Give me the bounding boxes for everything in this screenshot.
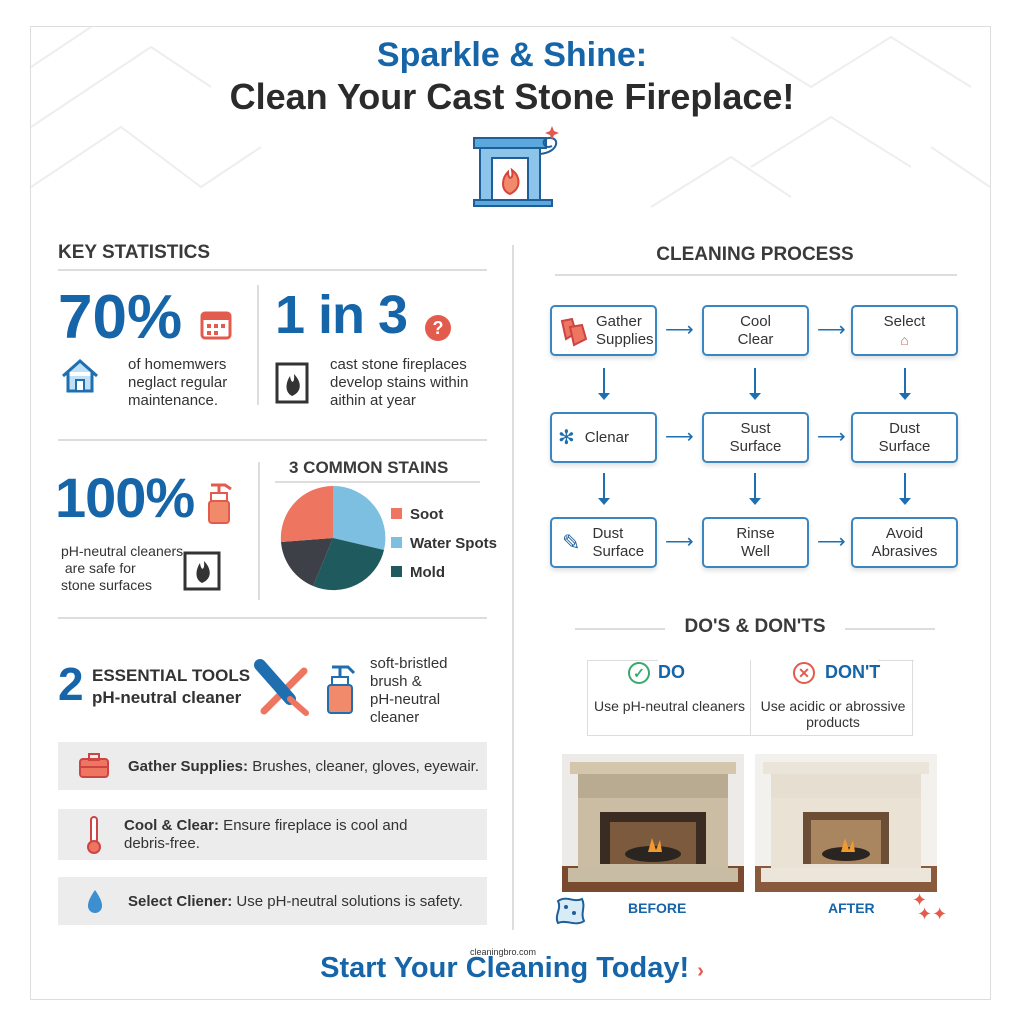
flow chart: Sust xyxy=(740,420,770,436)
label: after: AFTER xyxy=(828,900,875,916)
bar: select cleaner: Select Cliener: Use pH-neutral solutions is safety. xyxy=(128,892,463,910)
bar: gather supplies: Gather Supplies: Brushes, cleaner, gloves, eyewair. xyxy=(128,758,479,774)
do / don't box: ✕ xyxy=(798,665,810,681)
flow chart: ✎ xyxy=(562,530,580,554)
stat: 1 in 3: develop stains within xyxy=(330,374,468,391)
panel: 3 common stains: 3 COMMON STAINS xyxy=(289,458,448,477)
essential tools: ESSENTIAL TOOLS xyxy=(92,666,250,685)
heading: do's & don'ts xyxy=(575,616,935,638)
flow chart: Rinse xyxy=(736,524,775,542)
icon: question xyxy=(425,315,451,341)
stat: 70%: neglact regular xyxy=(128,374,227,391)
heading: cleaning process: CLEANING PROCESS xyxy=(656,244,854,265)
do / don't box: DON'T xyxy=(825,662,880,682)
legend xyxy=(391,506,497,581)
icon: sponge xyxy=(556,898,586,924)
flow chart: Gather xyxy=(596,312,642,330)
icon: sparkles: ✦ xyxy=(912,890,927,910)
flow chart: ⟶ xyxy=(817,531,846,553)
do / don't box: ✓ xyxy=(633,665,645,681)
icon: fireplace xyxy=(473,126,559,207)
flow chart: Cool xyxy=(740,312,771,330)
bar: cool & clear xyxy=(58,809,487,860)
legend: Mold xyxy=(410,564,445,581)
stat: 70%: of homemwers xyxy=(128,356,226,373)
essential tools: 2 xyxy=(58,658,84,710)
icon: spray bottle xyxy=(327,666,355,714)
panel: 3 common stains xyxy=(275,458,497,590)
footer cta: Start Your Cleaning Today! › xyxy=(320,952,704,984)
stat: 1 in 3 xyxy=(275,285,468,409)
label: before: BEFORE xyxy=(628,900,686,916)
do / don't box: Use pH-neutral cleaners xyxy=(594,698,745,714)
flow chart: Avoid xyxy=(886,524,923,542)
essential tools xyxy=(58,655,448,726)
heading: KEY STATISTICS xyxy=(58,242,210,263)
image: after fireplace xyxy=(755,754,937,892)
bar: cool & clear: debris-free. xyxy=(124,834,200,852)
icon: spray bottle xyxy=(208,484,232,524)
bar: cool & clear: Cool & Clear: Ensure fireplace is cool and xyxy=(124,816,407,834)
title xyxy=(230,36,794,117)
icon: question: ? xyxy=(432,318,444,338)
stat: 100%: 100% xyxy=(55,466,194,529)
flow chart: Surface xyxy=(730,438,781,454)
stat: 70%: 70% xyxy=(58,283,182,352)
flow chart: ✻ xyxy=(558,426,575,448)
essential tools: brush & xyxy=(370,673,422,690)
flow chart: Surface xyxy=(592,542,644,560)
do / don't box: DO xyxy=(658,662,685,682)
icon: fireplace xyxy=(184,552,220,590)
arrows: ⟶ xyxy=(665,319,694,341)
bar: select cleaner xyxy=(58,877,487,925)
flow chart: ⟶ xyxy=(817,319,846,341)
flow chart: Select xyxy=(884,312,925,330)
flow chart: Clenar xyxy=(585,428,629,446)
essential tools: pH-neutral xyxy=(370,691,440,708)
heading: do's & don'ts: DO'S & DON'TS xyxy=(684,616,826,637)
flow chart: Abrasives xyxy=(872,542,937,560)
flow chart: Clear xyxy=(738,330,773,348)
flow chart: Surface xyxy=(879,438,930,454)
flow chart: ⟶ xyxy=(665,426,694,448)
stat: 1 in 3: 1 in 3 xyxy=(275,285,407,345)
title: Sparkle & Shine: xyxy=(377,36,647,74)
image: before fireplace xyxy=(562,754,744,892)
flow chart: ⌂ xyxy=(900,332,909,348)
legend: Water Spots xyxy=(410,535,497,552)
icon: sparkles xyxy=(912,890,947,924)
stat: 70%: maintenance. xyxy=(128,392,218,409)
stat: 100% xyxy=(55,466,232,593)
pie chart xyxy=(280,486,386,590)
title: Clean Your Cast Stone Fireplace! xyxy=(230,76,794,117)
legend: Soot xyxy=(410,506,443,523)
stat: 1 in 3: cast stone fireplaces xyxy=(330,356,467,373)
icon: brush xyxy=(254,659,309,716)
icon: calendar xyxy=(200,312,232,340)
background pattern xyxy=(31,27,990,208)
essential tools: cleaner xyxy=(370,709,419,726)
flow chart: ⟶ xyxy=(665,531,694,553)
essential tools: pH-neutral cleaner xyxy=(92,688,241,707)
flow chart: Supplies xyxy=(596,330,654,348)
bar: gather supplies xyxy=(58,742,487,790)
flow chart: Well xyxy=(741,542,770,560)
footer url: cleaningbro.com xyxy=(470,947,536,957)
icon: sparkles: ✦✦ xyxy=(917,904,947,924)
flow chart: Dust xyxy=(592,524,623,542)
do / don't box xyxy=(587,660,913,736)
flow chart xyxy=(548,305,960,572)
icon: fireplace small xyxy=(276,362,308,404)
flow chart: Dust xyxy=(889,420,920,436)
flow chart: ⟶ xyxy=(817,426,846,448)
stat: 1 in 3: aithin at year xyxy=(330,392,416,409)
stat: 70% xyxy=(58,283,232,409)
stat: 100%: pH-neutral cleaners xyxy=(61,543,183,559)
icon: house xyxy=(62,359,98,392)
stat: 100%: stone surfaces xyxy=(61,577,152,593)
stat: 100%: are safe for xyxy=(65,560,136,576)
do / don't box: Use acidic or abrossive products xyxy=(761,698,905,730)
essential tools: soft-bristled xyxy=(370,655,448,672)
